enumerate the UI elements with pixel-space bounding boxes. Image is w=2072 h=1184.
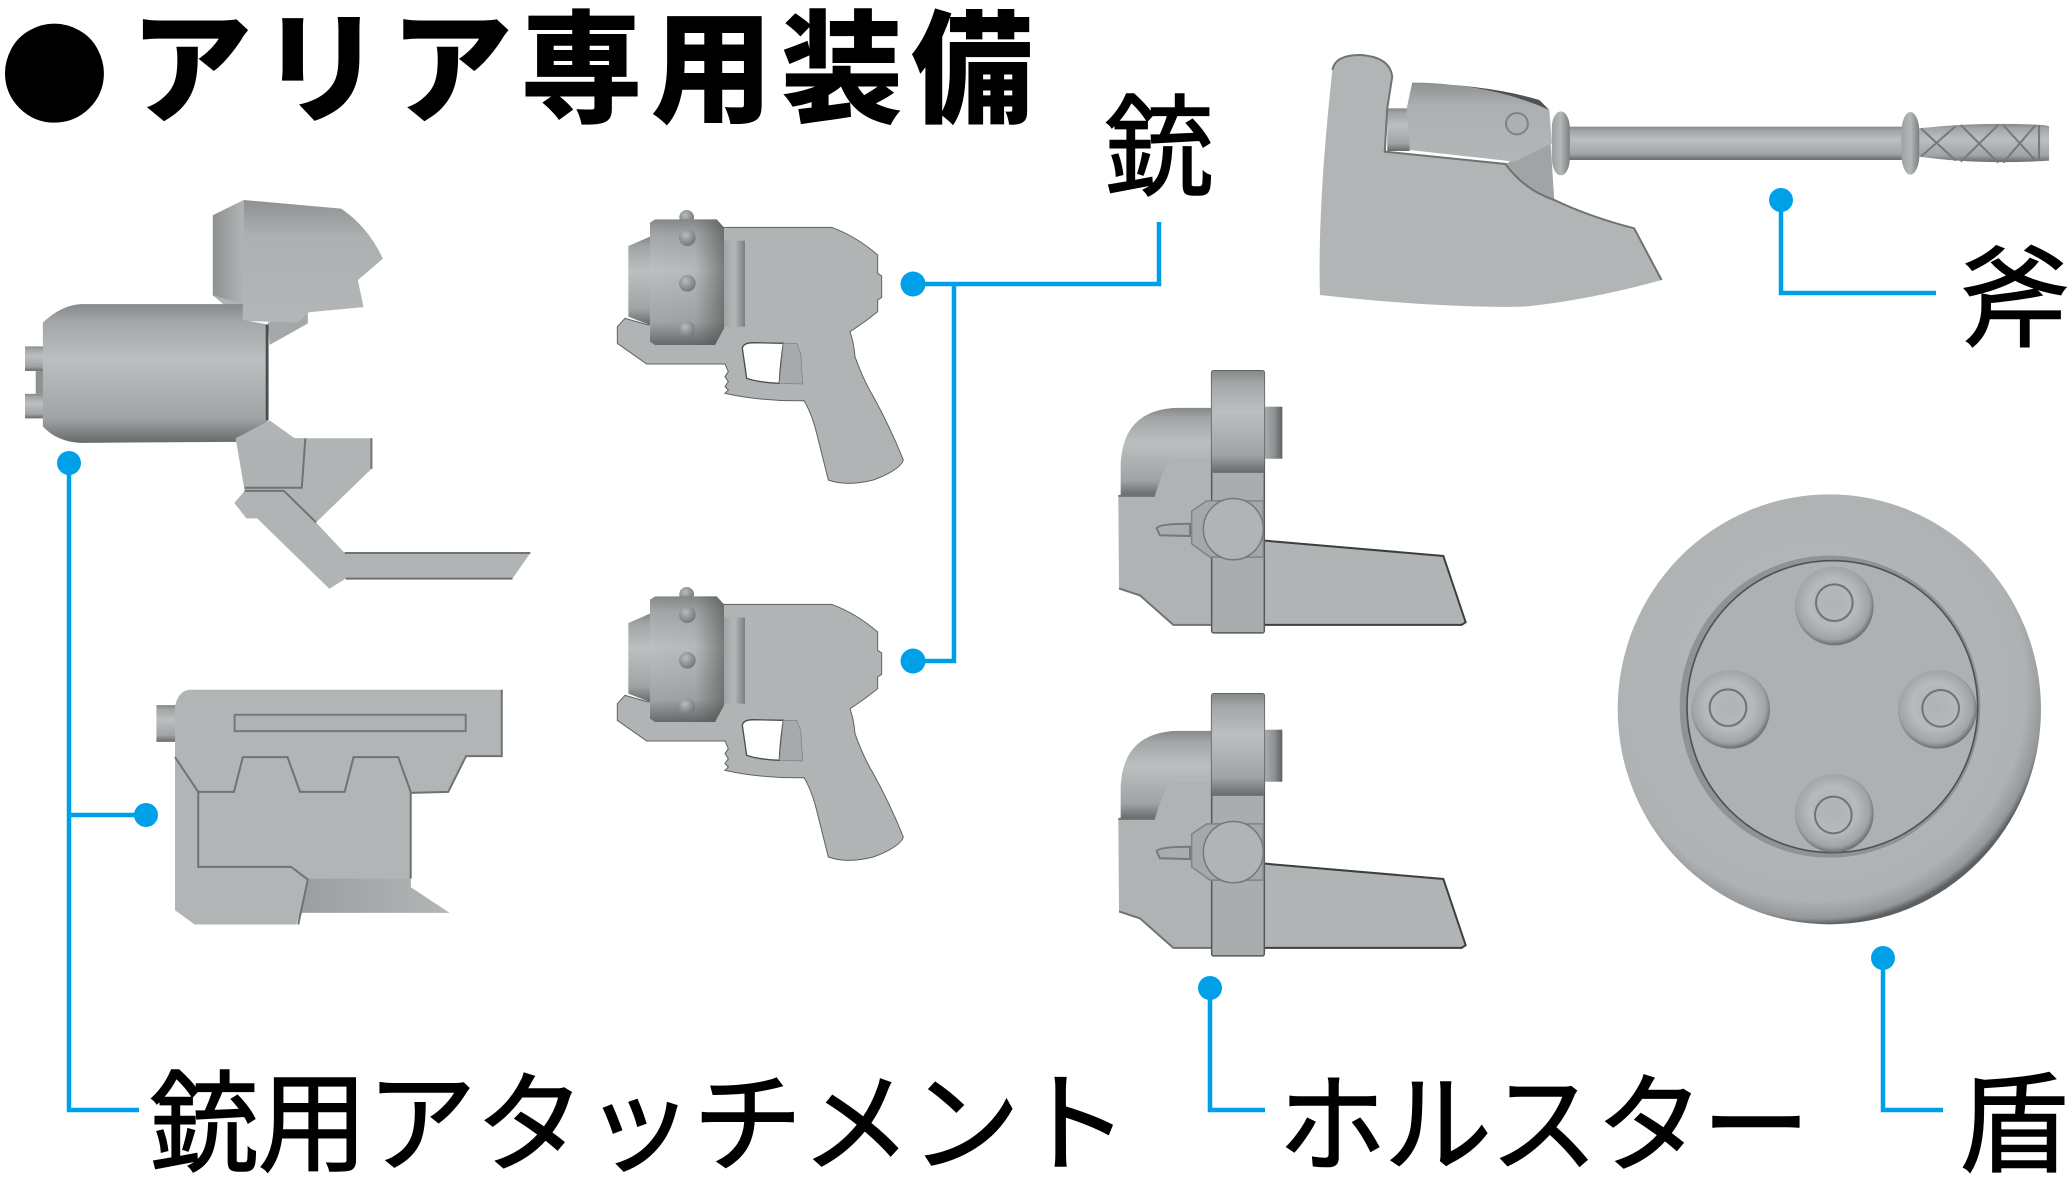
icon: holster upper xyxy=(1118,371,1466,633)
icon: shield xyxy=(1618,494,2041,924)
leader: gun attachment xyxy=(57,451,158,1110)
icon: axe xyxy=(1320,55,2049,307)
icon: gun lower xyxy=(617,587,903,860)
leader: shield xyxy=(1871,946,1943,1110)
label: gun attachment: 銃用アタッチメント xyxy=(149,1064,1129,1184)
leader: gun xyxy=(900,222,1159,674)
icon: gun upper xyxy=(617,210,903,483)
title: アリア専用装備 xyxy=(130,3,1033,139)
icon: gun attachment lower xyxy=(156,690,502,924)
label: gun: 銃 xyxy=(1104,88,1214,211)
leader: holster xyxy=(1198,976,1265,1110)
label: holster: ホルスター xyxy=(1278,1065,1810,1184)
label: shield: 盾 xyxy=(1960,1065,2068,1184)
title xyxy=(0,0,1033,187)
label: axe: 斧 xyxy=(1960,239,2070,362)
leader: axe xyxy=(1769,188,1936,293)
icon: holster lower xyxy=(1118,694,1466,956)
icon: gun attachment upper xyxy=(25,200,530,589)
